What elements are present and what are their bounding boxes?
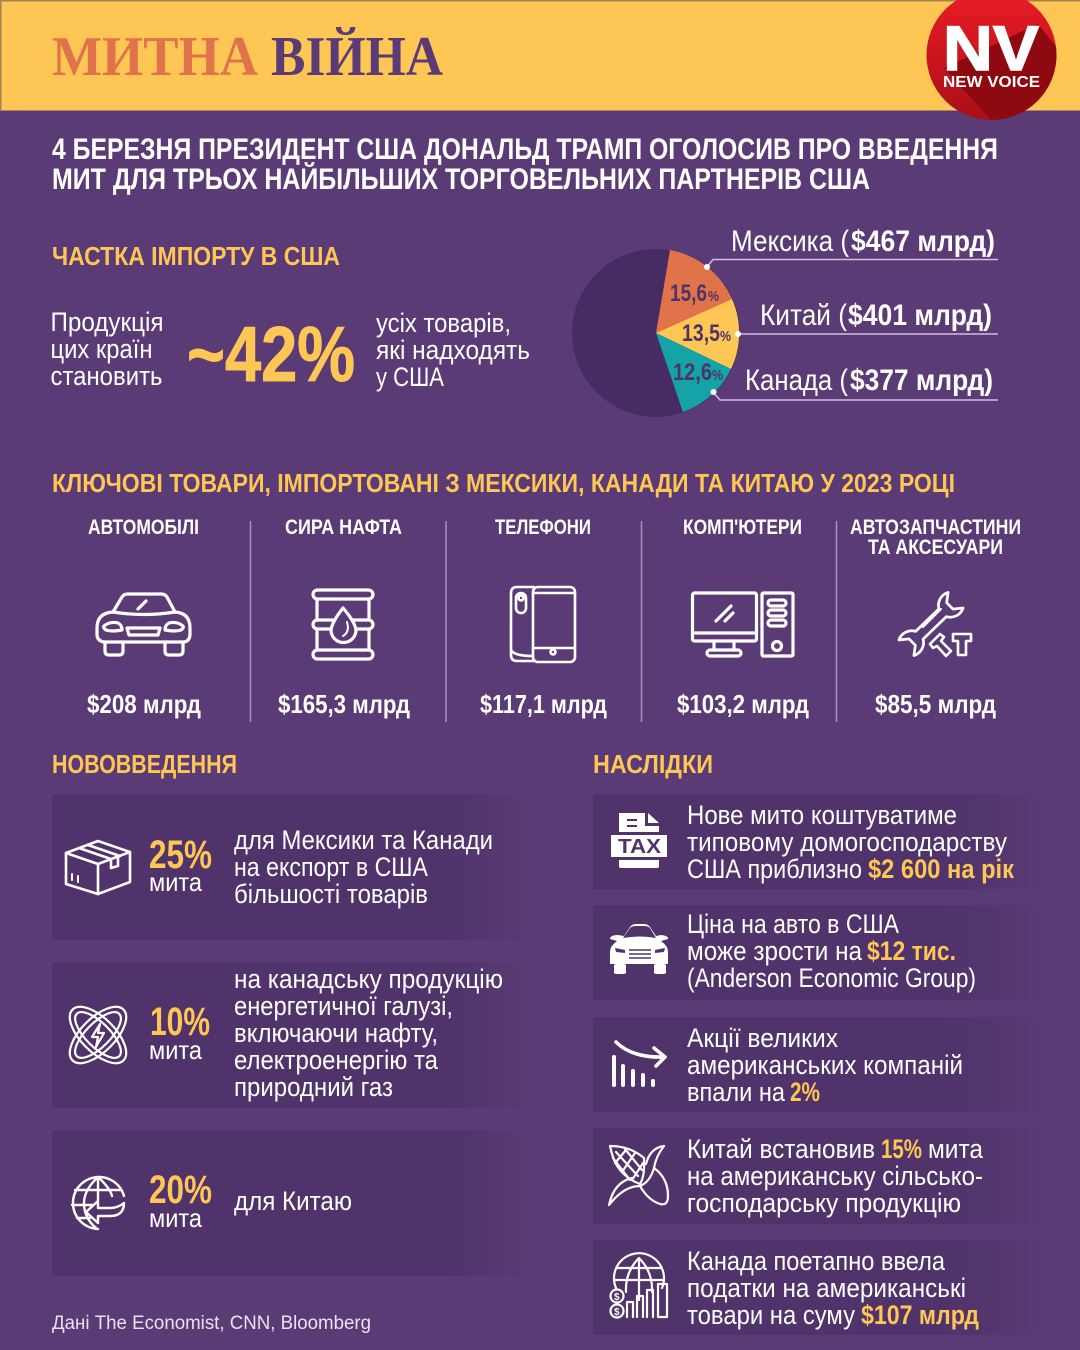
icon: globe with coins and bars: $	[614, 1307, 620, 1318]
pie label: Mexico: Мексика (	[731, 225, 849, 258]
text block: products of these countries: становить	[50, 361, 162, 391]
section heading: consequences: НАСЛІДКИ	[593, 749, 713, 779]
section heading: import share: ЧАСТКА ІМПОРТУ В США	[52, 241, 340, 271]
pie label: Mexico: $467 млрд)	[851, 225, 995, 258]
panel: 25% tariff: мита	[149, 867, 202, 897]
panel: household cost	[593, 794, 1063, 889]
text block: products of these countries	[50, 307, 164, 391]
column: cars	[87, 516, 201, 719]
text block: of all goods: усіх товарів,	[376, 308, 511, 338]
intro heading: МИТ ДЛЯ ТРЬОХ НАЙБІЛЬШИХ ТОРГОВЕЛЬНИХ ПАРТНЕРІВ США	[52, 162, 870, 196]
icon: box	[66, 841, 130, 894]
panel: car price: Ціна на авто в США	[687, 909, 899, 939]
panel: car price	[593, 905, 1063, 1000]
panel: 10% tariff: енергетичної галузі,	[234, 991, 453, 1021]
panel: 20% tariff: мита	[149, 1203, 202, 1233]
panel: 25% tariff: 25%	[149, 833, 212, 877]
column: phones	[480, 516, 607, 719]
text block: of all goods: які надходять	[376, 335, 530, 365]
pie label: Canada: Канада (	[745, 364, 848, 397]
panel: Canada taxes: $107 млрд	[861, 1300, 979, 1330]
column: auto parts: $85,5 млрд	[875, 689, 996, 719]
column: auto parts: ТА АКСЕСУАРИ	[868, 536, 1003, 559]
column: computers	[677, 516, 809, 719]
panel: China tariffs	[593, 1128, 1063, 1224]
text block: of all goods: у США	[376, 362, 444, 392]
panel: China tariffs: 15%	[881, 1134, 922, 1164]
panel: household cost: США приблизно	[687, 854, 862, 884]
pie label: Canada	[710, 364, 998, 400]
panel: car price: може зрости на	[687, 936, 863, 966]
panel: stocks fell: впали на	[687, 1077, 786, 1107]
panel: 25% tariff: на експорт в США	[234, 852, 428, 882]
panel: Canada taxes: Канада поетапно ввела	[687, 1246, 946, 1276]
logo: NV New Voice: NV	[943, 14, 1039, 84]
icon: corn	[609, 1146, 668, 1205]
pie chart: %	[712, 367, 723, 384]
panel: 25% tariff	[52, 794, 542, 940]
panel: 20% tariff: для Китаю	[234, 1186, 352, 1216]
icon: wrench and bolt	[898, 591, 971, 657]
section heading: innovations: НОВОВВЕДЕННЯ	[52, 749, 237, 779]
intro heading	[52, 133, 998, 196]
source note: Дані The Economist, CNN, Bloomberg	[52, 1313, 371, 1334]
text block: products of these countries: Продукція	[50, 307, 164, 337]
section heading: key goods: КЛЮЧОВІ ТОВАРИ, ІМПОРТОВАНІ З МЕКСИКИ, КАНАДИ ТА КИТАЮ У 2023 РОЦІ	[52, 468, 955, 498]
icon: energy atom	[61, 998, 135, 1072]
panel: stocks fell: 2%	[790, 1077, 820, 1107]
column: cars: $208 млрд	[87, 689, 201, 719]
pie label: Mexico	[704, 225, 998, 270]
pie chart: 12,6	[673, 359, 712, 386]
column: auto parts	[850, 516, 1021, 719]
panel: 20% tariff	[52, 1130, 542, 1276]
column: phones: ТЕЛЕФОНИ	[495, 516, 591, 539]
icon: desktop computer	[692, 593, 793, 656]
panel: 20% tariff: 20%	[149, 1168, 212, 1212]
panel: China tariffs: на американську сільсько-	[687, 1161, 983, 1191]
text block: products of these countries: цих країн	[50, 334, 152, 364]
pie label: China: $401 млрд)	[848, 299, 992, 332]
text block: of all goods	[376, 308, 530, 392]
panel: 25% tariff: більшості товарів	[234, 879, 428, 909]
panel: car price: $12 тис.	[867, 936, 956, 966]
column: auto parts: АВТОЗАПЧАСТИНИ	[850, 516, 1021, 539]
pie chart: 13,5	[682, 320, 720, 347]
panel: China tariffs: Китай встановив	[687, 1134, 875, 1164]
icon: globe with coins and bars: $	[614, 1292, 620, 1303]
column: crude oil	[278, 516, 410, 719]
pie chart	[572, 249, 740, 417]
pie label: China: Китай (	[760, 299, 847, 332]
panel: 10% tariff: електроенергію та	[234, 1045, 439, 1075]
icon: globe with coins and bars	[610, 1253, 667, 1318]
panel: 10% tariff: включаючи нафту,	[234, 1018, 438, 1048]
panel: Canada taxes	[593, 1240, 1063, 1335]
column: cars: АВТОМОБІЛІ	[88, 516, 199, 539]
big number 42%: ~42%	[187, 310, 355, 398]
pie label: Canada: $377 млрд)	[850, 364, 993, 397]
icon: oil barrel	[313, 590, 373, 659]
pie chart: %	[708, 288, 719, 305]
panel: 10% tariff	[52, 962, 542, 1108]
title: МИТНА	[52, 26, 259, 88]
panel: 10% tariff: природний газ	[234, 1072, 393, 1102]
panel: household cost: Нове мито коштуватиме	[687, 800, 957, 830]
icon: tax document: TAX	[618, 836, 662, 858]
title	[52, 26, 444, 88]
panel: car price: (Anderson Economic Group)	[687, 963, 976, 993]
logo: NV New Voice	[926, 0, 1056, 120]
icon: smartphones	[511, 587, 575, 662]
panel: 10% tariff: мита	[149, 1035, 202, 1065]
panel: stocks fell	[593, 1017, 1063, 1112]
panel: stocks fell: американських компаній	[687, 1050, 963, 1080]
column: computers: КОМП'ЮТЕРИ	[683, 516, 802, 539]
pie label: China	[735, 299, 998, 337]
panel: household cost: типовому домогосподарству	[687, 827, 1007, 857]
panel: China tariffs: господарську продукцію	[687, 1188, 961, 1218]
pie chart: 15,6	[670, 280, 707, 307]
icon: globe with arrow	[72, 1177, 124, 1229]
logo: NV New Voice: NEW VOICE	[943, 74, 1040, 91]
panel: stocks fell: Акції великих	[687, 1023, 838, 1053]
title: ВІЙНА	[271, 26, 444, 88]
icon: falling chart	[614, 1042, 665, 1085]
header band	[0, 0, 1080, 110]
column: crude oil: $165,3 млрд	[278, 689, 410, 719]
panel: Canada taxes: податки на американські	[687, 1273, 966, 1303]
pie chart: %	[720, 328, 731, 345]
column: computers: $103,2 млрд	[677, 689, 809, 719]
column: crude oil: СИРА НАФТА	[285, 516, 402, 539]
icon: tax document	[611, 813, 667, 868]
column: phones: $117,1 млрд	[480, 689, 607, 719]
panel: 10% tariff: на канадську продукцію	[234, 964, 503, 994]
panel: Canada taxes: товари на суму	[687, 1300, 855, 1330]
panel: household cost: $2 600 на рік	[868, 854, 1014, 884]
panel: China tariffs: мита	[928, 1134, 984, 1164]
panel: 10% tariff: 10%	[150, 1000, 210, 1044]
panel: 25% tariff: для Мексики та Канади	[234, 825, 493, 855]
icon: car filled	[610, 924, 668, 974]
icon: car	[97, 594, 190, 655]
